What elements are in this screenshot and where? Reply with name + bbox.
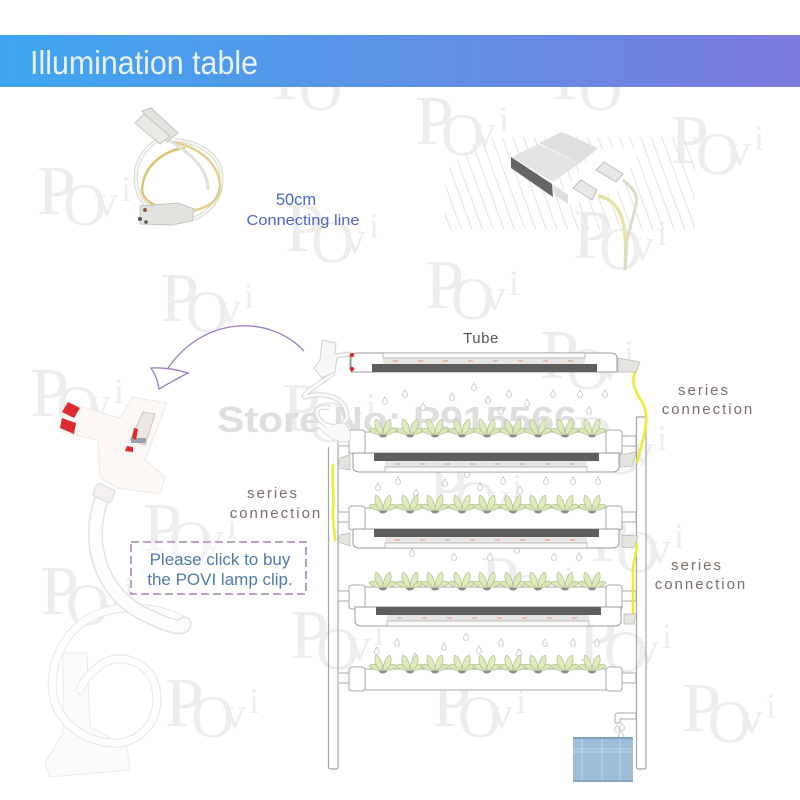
POVI watermarks: v bbox=[598, 339, 621, 390]
POVI watermarks: O bbox=[458, 684, 501, 750]
POVI watermarks: P bbox=[282, 370, 321, 447]
callout: buy lamp clip bbox=[131, 542, 306, 594]
POVI watermarks: P bbox=[40, 553, 79, 630]
POVI watermarks: P bbox=[425, 247, 464, 324]
diagram: lamp connection with hatching bbox=[445, 132, 695, 270]
POVI watermarks: O bbox=[451, 266, 494, 332]
faucet bbox=[615, 713, 636, 723]
label: series connection top right bbox=[662, 382, 754, 418]
POVI watermarks: P bbox=[590, 500, 629, 577]
POVI watermarks: i bbox=[121, 169, 131, 209]
POVI watermarks: P bbox=[540, 317, 579, 394]
POVI watermarks: i bbox=[244, 276, 254, 316]
POVI watermarks: v bbox=[343, 212, 366, 263]
POVI watermarks: O bbox=[579, 57, 622, 123]
POVI watermarks: O bbox=[66, 572, 109, 638]
POVI watermarks: v bbox=[728, 124, 751, 175]
POVI watermarks: P bbox=[415, 83, 454, 160]
POVI watermarks: i bbox=[369, 206, 379, 246]
POVI watermarks: P bbox=[432, 665, 471, 742]
POVI watermarks: v bbox=[218, 282, 241, 333]
POVI watermarks: O bbox=[696, 121, 739, 187]
wire plugs bbox=[338, 358, 640, 624]
POVI watermarks: P bbox=[553, 38, 592, 115]
POVI watermarks: O bbox=[299, 57, 342, 123]
POVI watermarks: i bbox=[564, 559, 574, 599]
clip base bbox=[45, 653, 130, 777]
POVI watermarks: O bbox=[63, 172, 106, 238]
title: Illumination table bbox=[30, 44, 258, 81]
cable caption: Connecting line bbox=[246, 212, 360, 229]
POVI watermarks: O bbox=[311, 209, 354, 275]
red pads bbox=[60, 402, 138, 452]
POVI watermarks: i bbox=[124, 569, 134, 609]
POVI watermarks: v bbox=[636, 622, 659, 673]
POVI watermarks: i bbox=[657, 418, 667, 458]
POVI watermarks: v bbox=[483, 269, 506, 320]
POVI watermarks: v bbox=[95, 175, 118, 226]
POVI watermarks: v bbox=[88, 377, 111, 428]
POVI watermarks: v bbox=[98, 575, 121, 626]
POVI watermarks: v bbox=[648, 522, 671, 573]
POVI watermarks: P bbox=[480, 543, 519, 620]
POVI watermarks: v bbox=[631, 424, 654, 475]
label: series connection bottom right: series bbox=[671, 557, 723, 574]
POVI watermarks: O bbox=[566, 336, 609, 402]
POVI watermarks: P bbox=[573, 402, 612, 479]
POVI watermarks: i bbox=[754, 118, 764, 158]
gooseneck arm bbox=[52, 495, 184, 743]
POVI watermarks: v bbox=[223, 687, 246, 738]
label: series connection top right: connection bbox=[662, 401, 754, 418]
POVI watermarks: O bbox=[454, 469, 497, 535]
POVI watermarks: P bbox=[682, 670, 721, 747]
POVI watermarks: O bbox=[599, 216, 642, 282]
POVI watermarks: P bbox=[670, 102, 709, 179]
POVI watermarks: v bbox=[486, 472, 509, 523]
POVI watermarks: i bbox=[249, 681, 259, 721]
water drops bbox=[374, 383, 624, 738]
label: series connection bottom right bbox=[655, 557, 747, 593]
POVI watermarks: P bbox=[165, 665, 204, 742]
POVI watermarks: i bbox=[512, 466, 522, 506]
POVI watermarks: O bbox=[708, 689, 751, 755]
POVI watermarks: P bbox=[578, 600, 617, 677]
POVI watermarks: i bbox=[114, 371, 124, 411]
gooseneck lamp clip bbox=[45, 397, 184, 777]
POVI watermarks: O bbox=[599, 421, 642, 487]
clip head bbox=[62, 397, 167, 494]
POVI watermarks: v bbox=[340, 392, 363, 443]
small lamp clip on top tube bbox=[304, 340, 354, 442]
planting pipes bbox=[338, 430, 636, 691]
label: series connection left: series bbox=[247, 485, 299, 502]
yellow series wires bbox=[332, 368, 646, 613]
POVI watermarks: i bbox=[366, 386, 376, 426]
POVI watermarks: v bbox=[348, 619, 371, 670]
POVI watermarks: P bbox=[273, 38, 312, 115]
POVI watermarks: v bbox=[473, 105, 496, 156]
POVI watermarks: O bbox=[186, 279, 229, 345]
POVI watermarks: O bbox=[506, 562, 549, 628]
POVI watermarks: i bbox=[509, 263, 519, 303]
POVI watermarks: O bbox=[191, 684, 234, 750]
POVI watermarks: i bbox=[374, 613, 384, 653]
callout: buy lamp clip: the POVI lamp clip. bbox=[147, 570, 293, 589]
POVI watermarks: P bbox=[428, 450, 467, 527]
POVI watermarks: O bbox=[56, 374, 99, 440]
POVI watermarks: P bbox=[160, 260, 199, 337]
POVI watermarks: P bbox=[573, 197, 612, 274]
POVI watermarks: P bbox=[285, 190, 324, 267]
label: Tube: Tube bbox=[463, 330, 499, 347]
rack legs bbox=[328, 417, 646, 769]
header banner bbox=[0, 35, 800, 87]
store number watermark: Store No: P915566 bbox=[217, 399, 577, 440]
POVI watermarks: i bbox=[766, 686, 776, 726]
label: series connection left bbox=[230, 485, 322, 522]
POVI watermarks: v bbox=[631, 219, 654, 270]
arrow: purple curved pointer bbox=[151, 326, 304, 389]
POVI watermarks: v bbox=[201, 512, 224, 563]
POVI watermarks: v bbox=[740, 692, 763, 743]
callout: buy lamp clip: Please click to buy bbox=[150, 550, 291, 569]
POVI watermarks: i bbox=[227, 506, 237, 546]
POVI watermarks: O bbox=[169, 509, 212, 575]
POVI watermarks: O bbox=[441, 102, 484, 168]
plants bbox=[369, 419, 606, 674]
label: series connection top right: series bbox=[678, 382, 730, 399]
POVI watermarks: i bbox=[516, 681, 526, 721]
hydroponic rack diagram bbox=[304, 340, 646, 782]
label: series connection left: connection bbox=[230, 505, 322, 522]
POVI watermarks: v bbox=[538, 565, 561, 616]
label: series connection bottom right: connection bbox=[655, 576, 747, 593]
lamp tubes bbox=[351, 353, 621, 626]
POVI watermarks: O bbox=[604, 619, 647, 685]
POVI watermarks: P bbox=[143, 490, 182, 567]
POVI watermarks: i bbox=[624, 333, 634, 373]
POVI watermarks: O bbox=[616, 519, 659, 585]
cable caption bbox=[246, 191, 360, 229]
POVI watermarks: O bbox=[316, 616, 359, 682]
cable caption: 50cm bbox=[276, 191, 316, 209]
icon: connecting cable bbox=[135, 108, 221, 225]
POVI watermarks: i bbox=[657, 213, 667, 253]
POVI watermarks: i bbox=[662, 616, 672, 656]
POVI watermarks: i bbox=[674, 516, 684, 556]
POVI watermarks: P bbox=[290, 597, 329, 674]
POVI watermarks: i bbox=[499, 99, 509, 139]
POVI watermarks: O bbox=[308, 389, 351, 455]
POVI watermarks: P bbox=[37, 153, 76, 230]
POVI watermarks: P bbox=[30, 355, 69, 432]
POVI watermarks: v bbox=[490, 687, 513, 738]
water tank bbox=[573, 737, 633, 782]
